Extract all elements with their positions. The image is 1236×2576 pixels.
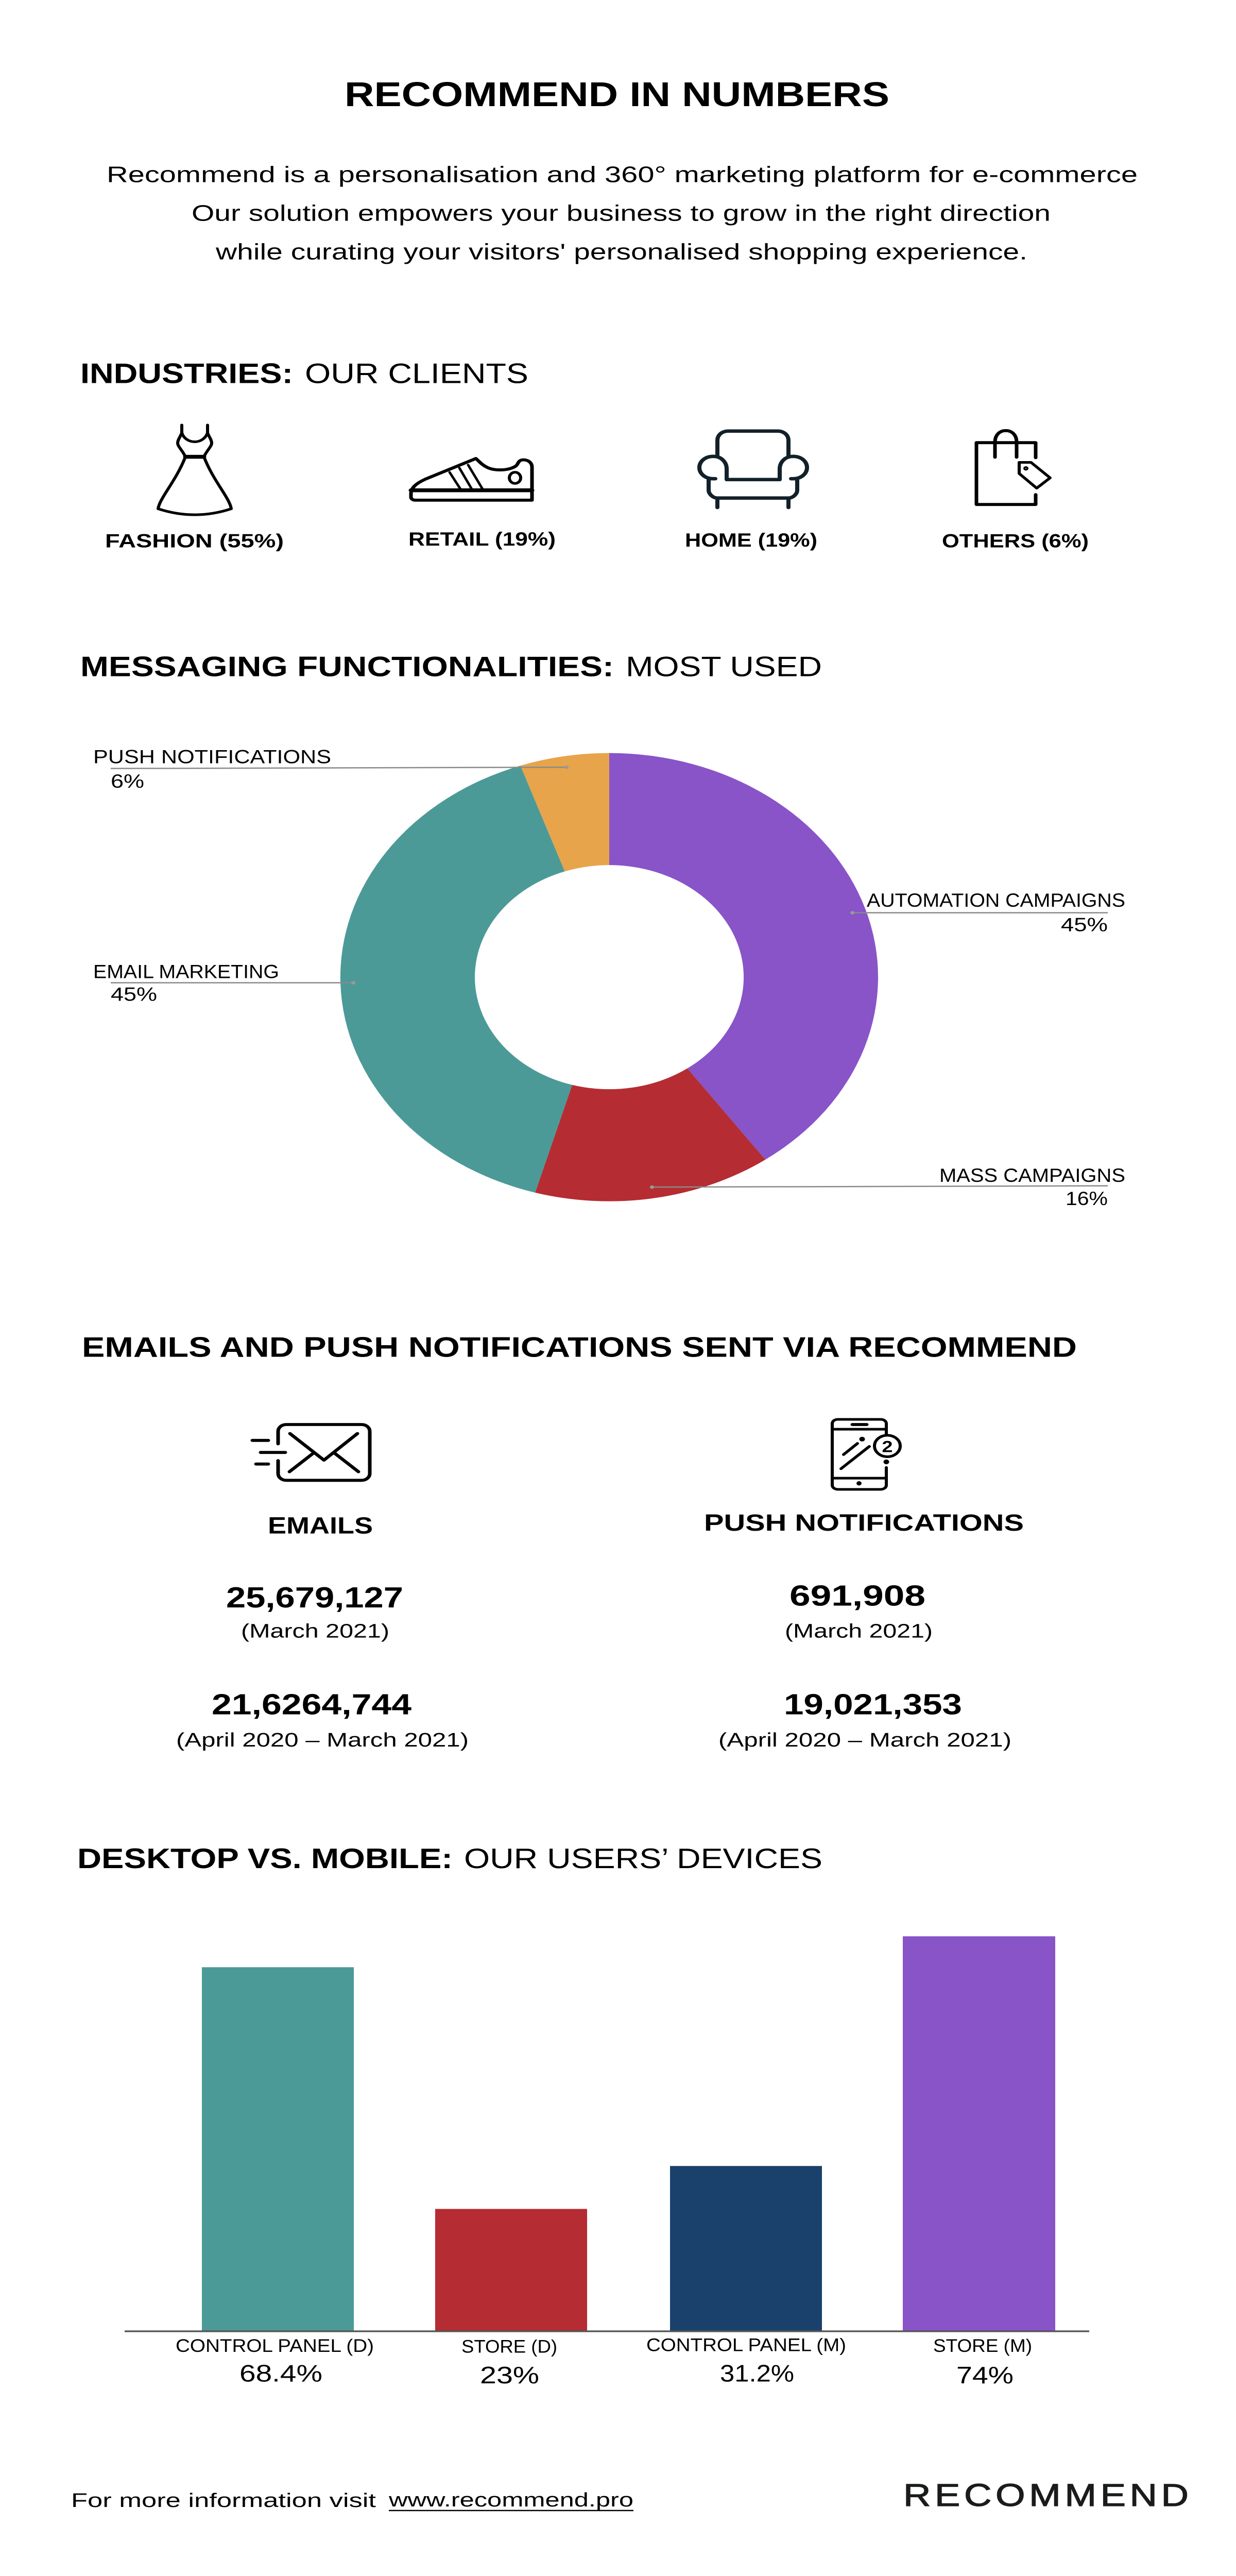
footer link text: For more information visit — [71, 2489, 376, 2511]
heading: industries: INDUSTRIES: — [80, 358, 293, 389]
intro text: while curating your visitors' personalised shopping experience. — [215, 240, 1027, 264]
callout: push notifications: 6% — [111, 771, 144, 792]
heading: emails and push: EMAILS AND PUSH NOTIFICATIONS SENT VIA RECOMMEND — [82, 1331, 1077, 1363]
icon: sneaker — [411, 459, 532, 500]
industry labels: HOME (19%) — [685, 529, 817, 551]
icon: dress — [158, 425, 231, 515]
donut chart — [340, 753, 878, 1201]
callout: mass campaigns: 16% — [1066, 1188, 1108, 1209]
callout: mass campaigns — [650, 1165, 1125, 1209]
bar label: control panel desktop: CONTROL PANEL (D) — [176, 2336, 374, 2356]
heading: industries: OUR CLIENTS — [305, 358, 528, 389]
emails column: (March 2021) — [241, 1620, 389, 1641]
bar label: store mobile — [933, 2336, 1032, 2388]
intro text — [107, 162, 1138, 264]
industry labels: FASHION (55%) — [105, 530, 284, 552]
bar label: control panel mobile: CONTROL PANEL (M) — [646, 2335, 846, 2355]
bar label: store mobile: STORE (M) — [933, 2336, 1032, 2356]
bar label: store mobile: 74% — [956, 2361, 1014, 2388]
title: RECOMMEND IN NUMBERS — [345, 75, 889, 113]
callout: email marketing: EMAIL MARKETING — [93, 961, 279, 982]
heading: messaging: MOST USED — [626, 651, 822, 682]
heading: messaging: MESSAGING FUNCTIONALITIES: — [80, 651, 614, 682]
bar chart — [125, 1936, 1089, 2332]
push notifications column: (April 2020 – March 2021) — [718, 1729, 1011, 1751]
bar label: store desktop: STORE (D) — [461, 2337, 557, 2357]
icon: shopping bag with tag — [976, 431, 1050, 504]
emails column: 25,679,127 — [226, 1581, 403, 1614]
bar label: control panel desktop — [176, 2336, 374, 2386]
push notifications column: 19,021,353 — [784, 1688, 962, 1721]
heading: desktop vs mobile: DESKTOP VS. MOBILE: — [77, 1842, 453, 1874]
callout: automation campaigns: AUTOMATION CAMPAIGNS — [867, 890, 1125, 911]
heading: industries — [80, 358, 528, 389]
callout: push notifications — [93, 746, 569, 792]
emails column: (April 2020 – March 2021) — [176, 1729, 469, 1751]
emails column: EMAILS — [268, 1513, 373, 1539]
heading: desktop vs mobile — [77, 1842, 822, 1874]
bar label: store desktop: 23% — [480, 2361, 539, 2388]
icon: sending email — [252, 1425, 370, 1480]
intro text: Our solution empowers your business to grow in the right direction — [192, 201, 1051, 226]
bar label: control panel mobile — [646, 2335, 846, 2386]
bar label: control panel desktop: 68.4% — [239, 2360, 322, 2386]
footer link text — [71, 2489, 633, 2511]
bar label: store desktop — [461, 2337, 557, 2388]
push notifications column — [704, 1510, 1024, 1751]
industry labels: OTHERS (6%) — [942, 530, 1089, 552]
push notifications column: 691,908 — [789, 1580, 925, 1612]
callout: email marketing: 45% — [111, 984, 157, 1005]
footer link text: www.recommend.pro — [388, 2489, 633, 2511]
industry labels: RETAIL (19%) — [408, 529, 556, 550]
callout: email marketing — [93, 961, 355, 1005]
callout: automation campaigns — [850, 890, 1125, 936]
emails column — [176, 1513, 469, 1751]
callout: mass campaigns: MASS CAMPAIGNS — [939, 1165, 1125, 1186]
callout: automation campaigns: 45% — [1061, 914, 1108, 936]
icon: phone notification: 2 — [882, 1437, 893, 1456]
bar label: control panel mobile: 31.2% — [720, 2360, 794, 2386]
emails column: 21,6264,744 — [212, 1688, 411, 1721]
push notifications column: PUSH NOTIFICATIONS — [704, 1510, 1024, 1536]
icon: phone notification — [832, 1419, 900, 1489]
intro text: Recommend is a personalisation and 360° marketing platform for e-commerce — [107, 162, 1138, 187]
callout: push notifications: PUSH NOTIFICATIONS — [93, 746, 331, 768]
icon: armchair — [699, 431, 807, 507]
logo: RECOMMEND — [903, 2478, 1189, 2513]
industry labels — [105, 529, 1089, 552]
push notifications column: (March 2021) — [785, 1620, 933, 1641]
heading: desktop vs mobile: OUR USERS’ DEVICES — [464, 1842, 822, 1874]
